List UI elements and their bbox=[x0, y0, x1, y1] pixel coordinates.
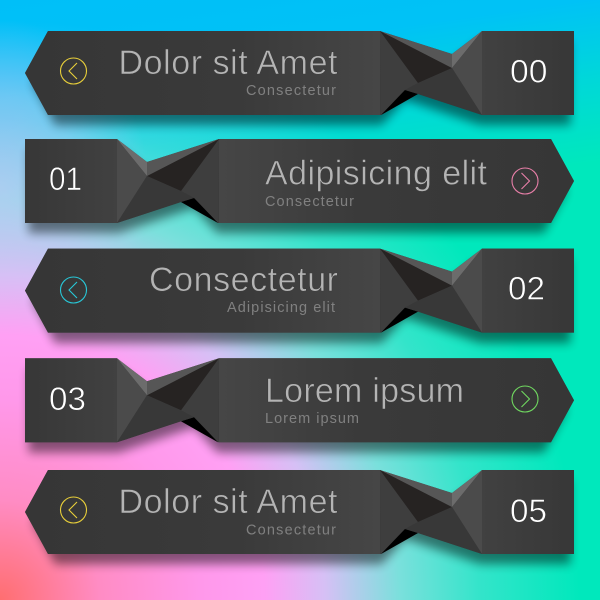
number 03: 03 bbox=[49, 381, 86, 417]
ribbon 4 shape bbox=[25, 358, 574, 442]
ribbon 2 bbox=[25, 139, 574, 233]
ribbon 5 bbox=[25, 470, 574, 564]
heading 2: Adipisicing elit bbox=[265, 154, 488, 192]
number 02: 02 bbox=[508, 270, 545, 306]
ribbon 4 shadow bbox=[28, 368, 567, 452]
subheading 5: Consectetur bbox=[246, 522, 336, 538]
icon: right chevron green bbox=[512, 386, 538, 412]
ribbon 1 shape bbox=[25, 31, 574, 115]
subheading 4: Lorem ipsum bbox=[265, 411, 359, 427]
subheading 2: Consectetur bbox=[265, 194, 354, 210]
ribbon 4 bbox=[25, 358, 574, 452]
ribbon 3 shadow bbox=[32, 259, 571, 343]
ribbon 3 shape bbox=[25, 249, 574, 333]
number 01: 01 bbox=[49, 161, 82, 197]
subheading 3: Adipisicing elit bbox=[227, 300, 335, 316]
subheading 1: Consectetur bbox=[246, 83, 336, 99]
ribbon 2 shape bbox=[25, 139, 574, 223]
icon: left chevron yellow bbox=[60, 497, 86, 523]
icon: right chevron pink bbox=[512, 168, 538, 194]
number 05: 05 bbox=[510, 493, 547, 529]
heading 3: Consectetur bbox=[149, 261, 338, 299]
ribbon 3 bbox=[25, 249, 574, 343]
ribbon 5 shape bbox=[25, 470, 574, 554]
ribbon 2 shadow bbox=[28, 149, 567, 233]
heading 4: Lorem ipsum bbox=[265, 372, 464, 410]
ribbon 1 bbox=[25, 31, 574, 125]
icon: left chevron yellow bbox=[60, 58, 86, 84]
heading 1: Dolor sit Amet bbox=[118, 44, 338, 82]
ribbon 1 shadow bbox=[32, 41, 571, 125]
number 00: 00 bbox=[510, 54, 548, 90]
icon: left chevron cyan bbox=[60, 277, 86, 303]
ribbon 5 shadow bbox=[32, 480, 571, 564]
heading 5: Dolor sit Amet bbox=[118, 483, 338, 521]
